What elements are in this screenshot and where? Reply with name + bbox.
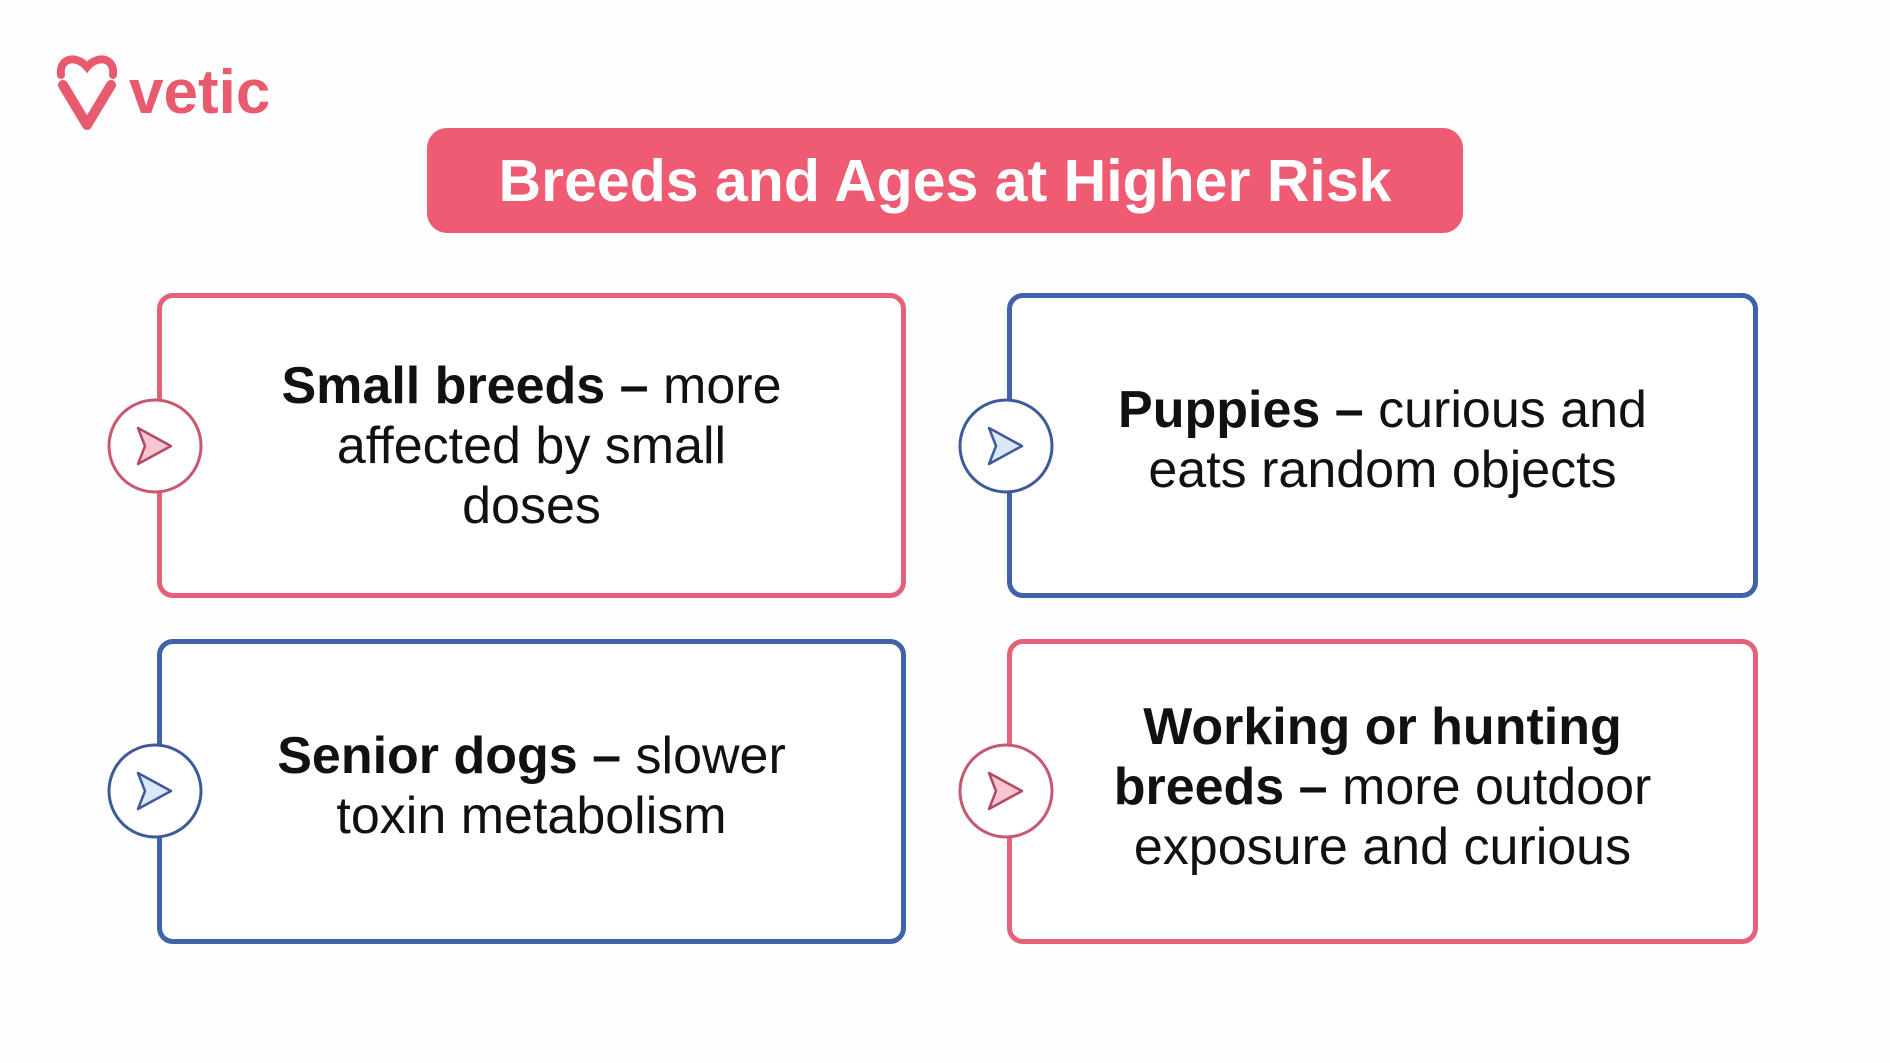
panel: working breeds: breeds – more outdoor — [1114, 758, 1651, 816]
icon: arrow blue 2 — [108, 744, 202, 838]
icon: arrow blue 1 — [958, 398, 1054, 494]
panel: senior dogs: Senior dogs – slower — [277, 726, 786, 784]
panel: small breeds: affected by small — [337, 416, 726, 474]
panel: puppies: Puppies – curious and — [1118, 380, 1647, 438]
icon: heart V — [56, 55, 118, 130]
panel: senior dogs — [157, 639, 906, 944]
icon: arrow pink 2 — [958, 744, 1054, 838]
panel: working breeds — [1007, 639, 1758, 944]
logo — [56, 55, 270, 130]
panel: working breeds: exposure and curious — [1134, 818, 1631, 876]
title — [427, 128, 1463, 233]
panel: small breeds: Small breeds – more — [282, 356, 782, 414]
panel: small breeds: doses — [462, 476, 601, 534]
title: Breeds and Ages at Higher Risk — [499, 148, 1391, 214]
panel: senior dogs: toxin metabolism — [336, 786, 727, 844]
icon: arrow pink 1 — [108, 398, 202, 494]
panel: puppies: eats random objects — [1148, 440, 1617, 498]
panel: puppies — [1007, 293, 1758, 598]
panel: small breeds — [157, 293, 906, 598]
panel: working breeds: Working or hunting — [1143, 698, 1622, 756]
logo text: vetic — [129, 58, 270, 127]
